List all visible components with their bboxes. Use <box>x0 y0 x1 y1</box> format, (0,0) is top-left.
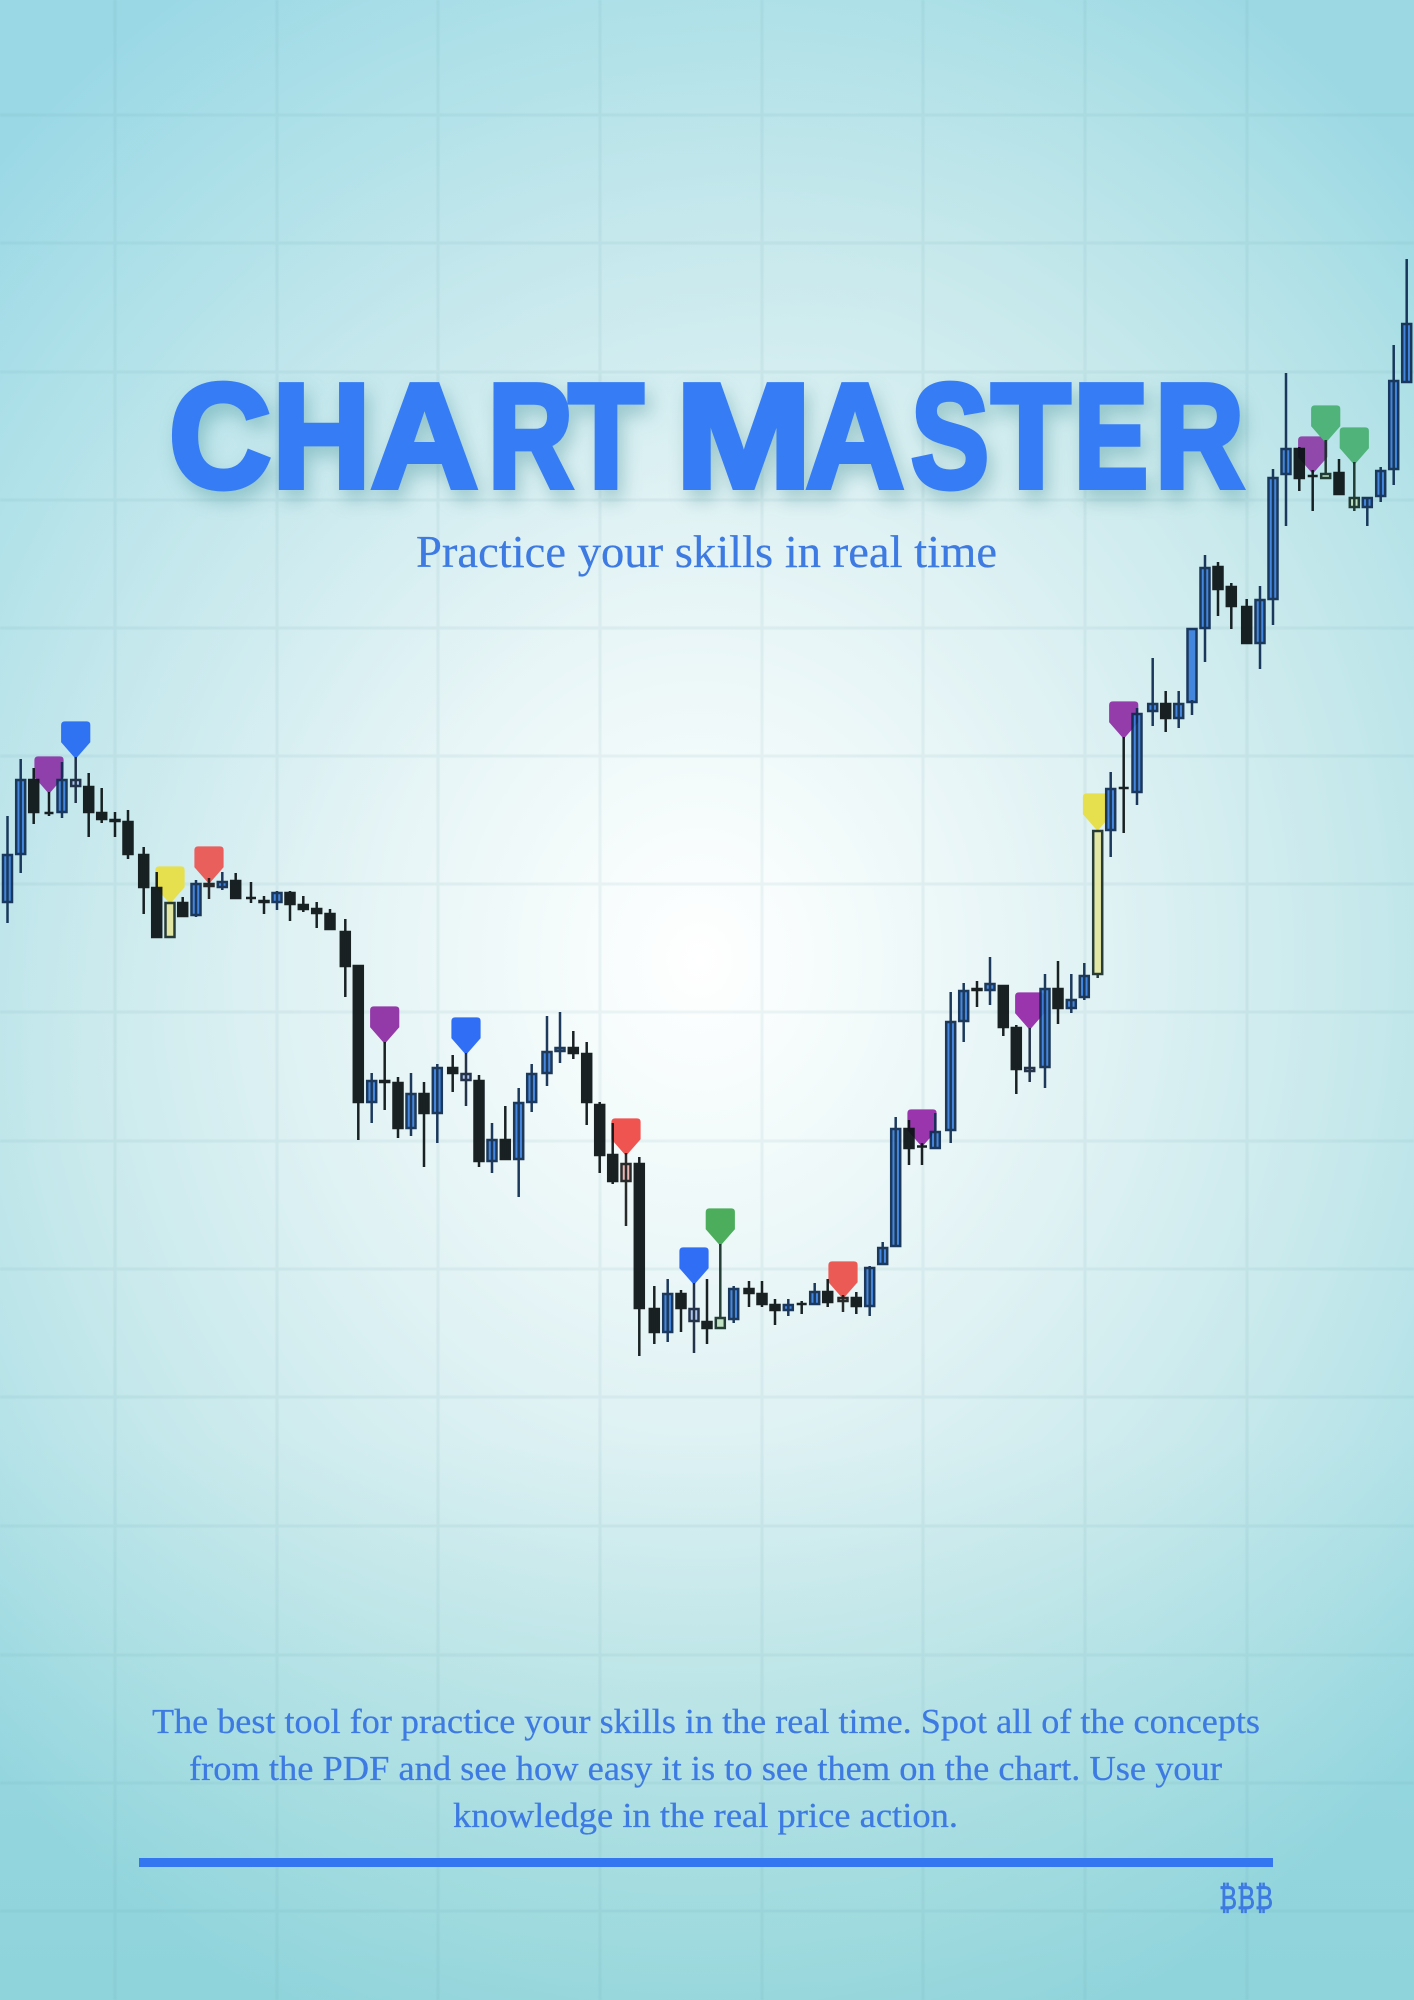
title: T <box>568 354 644 519</box>
title: A <box>806 354 904 519</box>
title: E <box>1074 354 1148 519</box>
signal markers <box>35 406 1368 1298</box>
subtitle: Practice your skills in real time <box>416 526 997 577</box>
title: M <box>676 354 812 519</box>
title: S <box>911 354 989 519</box>
bitcoin symbols: ₿₿₿ <box>1219 1879 1273 1917</box>
title: T <box>991 354 1070 519</box>
description text: The best tool for practice your skills in the real time. Spot all of the concepts <box>152 1702 1260 1741</box>
candlesticks <box>3 259 1411 1356</box>
title: R <box>1155 354 1244 519</box>
description text <box>152 1702 1260 1835</box>
description text: knowledge in the real price action. <box>453 1796 958 1835</box>
candlestick chart with signal markers <box>3 259 1411 1356</box>
divider bar <box>139 1858 1273 1867</box>
title: R <box>488 354 573 519</box>
title: A <box>371 354 478 519</box>
title: C <box>169 354 271 519</box>
title: H <box>272 354 370 519</box>
description text: from the PDF and see how easy it is to see them on the chart. Use your <box>189 1749 1222 1788</box>
